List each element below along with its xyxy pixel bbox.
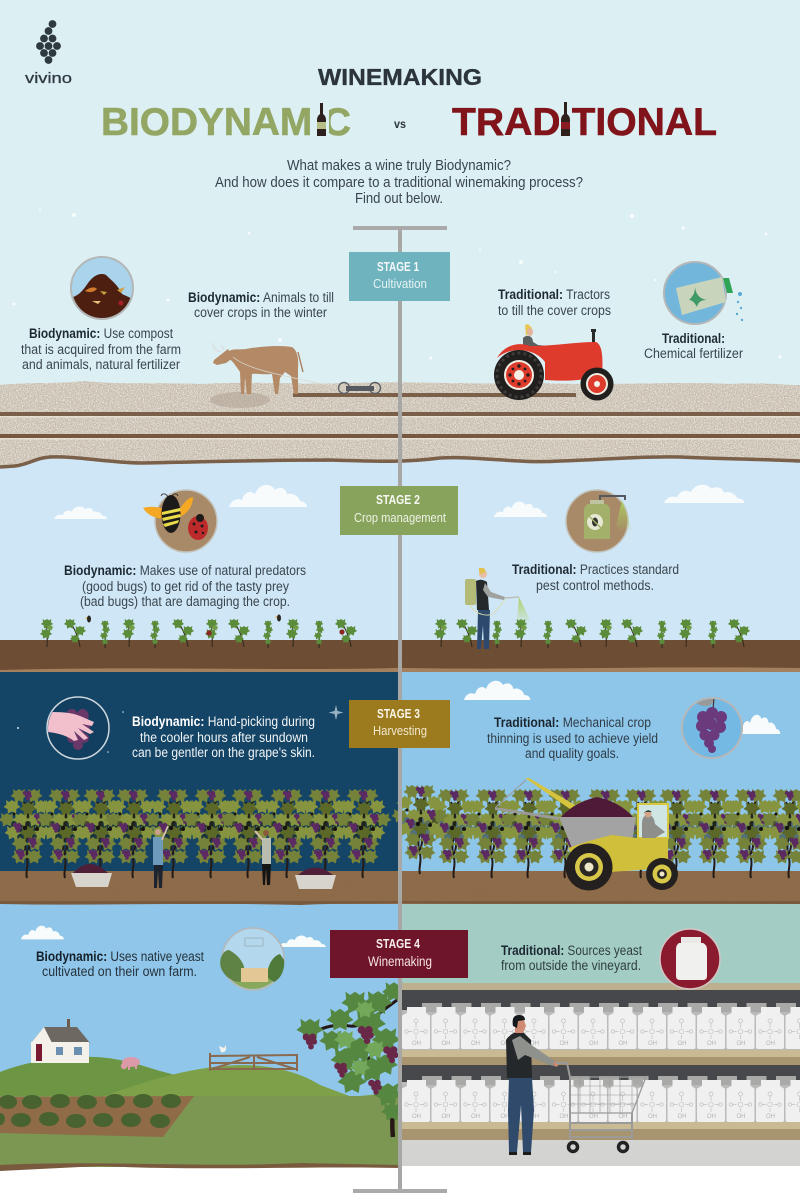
jars row two [402,1076,800,1122]
jars row two: OH [412,1114,421,1120]
stage 4 label: STAGE 4 [376,937,420,951]
text: compost [21,326,181,372]
icon: bee and ladybug [143,490,217,552]
jars row one: OH [560,1041,568,1047]
jars row two: OH [589,1114,598,1120]
text: chemical fertilizer [644,331,743,361]
text: mechanical: Traditional: Mechanical crop [494,715,651,730]
text: predators: (good bugs) to get rid of the tasty prey [82,579,289,594]
stage 4 label [330,930,468,978]
stage 1 label: Cultivation [373,276,427,291]
text: predators: Biodynamic: Makes use of natural predators [64,563,306,578]
icon: tractor [494,324,614,400]
jars row two: OH [500,1114,510,1120]
icon: shopper [506,1015,559,1155]
intro text: And how does it compare to a traditional winemaking process? [215,175,583,191]
icon: native yeast farm [220,928,284,990]
icon: shopping cart [556,1063,646,1152]
icon: grape bunch [682,690,742,758]
text: tractors: Traditional: Tractors [498,287,610,302]
icon: fence [210,1053,297,1071]
stage 3 label: Harvesting [373,723,427,738]
text: chemical fertilizer: Traditional: [662,331,725,346]
title: WINEMAKING [318,64,482,90]
jars row two: OH [442,1114,450,1120]
text: hand-picking: the cooler hours after sundown [140,730,308,745]
jars row one: OH [589,1041,598,1047]
icon: pesticide bottle [566,490,632,552]
text: native yeast: Biodynamic: Uses native yeast [36,949,204,964]
stars [17,705,344,753]
text: tractors [498,287,611,318]
stage 2 label: STAGE 2 [376,493,420,507]
vines biodynamic row [0,789,392,878]
text: mechanical: and quality goals. [525,746,619,761]
text: predators: (bad bugs) that are damaging the crop. [80,594,290,609]
logo: vivino: vivino [25,70,72,87]
jars row one: OH [618,1041,628,1047]
text: sources yeast [501,943,642,973]
heading: Biodynamic: BIODYNAMIC [101,101,351,144]
stage 3 label: STAGE 3 [377,707,420,721]
text: hand-picking [132,714,315,760]
panel: stage 1 ground [0,378,800,470]
panel: stage 2 soil [0,640,800,673]
icon: chicken [219,1045,226,1052]
text: tractors: to till the cover crops [498,303,611,318]
plants: biodynamic row [40,614,357,648]
jars row one: OH [648,1041,657,1047]
text: compost: Biodynamic: Use compost [29,326,173,341]
jars row one: OH [736,1041,746,1047]
vines traditional row [392,785,800,878]
text: native yeast [36,949,204,979]
icon: grape bins [71,864,336,889]
icon: yeast jar [660,929,720,989]
cloud group: stage 4 [21,926,326,947]
text: animals: Biodynamic: Animals to till [188,290,334,305]
icon: vine tree [296,982,406,1137]
panel: stage 4 right wall [400,904,800,984]
jars row two: OH [471,1114,480,1120]
logo: vivino [25,20,72,87]
stage 2 label [340,486,458,535]
jars row one: OH [707,1041,716,1047]
jars row two: OH [618,1114,628,1120]
icon: plough [338,382,380,394]
jars row two: OH [766,1114,775,1120]
panel: header background [0,0,800,400]
intro text: Find out below. [355,191,443,207]
text: hand-picking: Biodynamic: Hand-picking during [132,714,315,729]
panel: store shelves [402,983,800,1166]
jars row two: OH [707,1114,716,1120]
text: native yeast: cultivated on their own farm. [42,964,197,979]
cloud group: stage 3 [464,681,780,734]
text: compost: and animals, natural fertilizer [22,357,180,372]
intro text [215,158,583,207]
panel: farm landscape [0,1019,400,1171]
panel: stage 2 background [0,450,800,641]
text: mechanical [487,715,658,761]
icon: pig [121,1057,140,1070]
icon: picker one [153,826,168,888]
intro text: What makes a wine truly Biodynamic? [287,158,511,174]
jars row one: OH [766,1041,775,1047]
icon: farmhouse [31,1019,90,1063]
jars row one: OH [471,1041,480,1047]
stage 3 label [349,700,450,748]
stage 1 label: STAGE 1 [377,260,419,274]
text: sources yeast: from outside the vineyard. [501,958,641,973]
jars row one: OH [412,1041,421,1047]
stage 1 label [349,252,450,301]
panel: stage 3 backgrounds [0,672,800,872]
stage 4 label: Winemaking [368,953,432,969]
jars row two: OH [648,1114,657,1120]
text: animals [188,290,334,320]
panel: stage 4 left sky [0,904,400,1166]
title [101,64,717,144]
snow dots [12,209,782,360]
panel: stage 3 soil [0,871,800,904]
vs: vs [394,117,406,131]
text: hand-picking: can be gentler on the grape's skin. [132,745,315,760]
text: chemical fertilizer: Chemical fertilizer [644,346,743,361]
text: compost: that is acquired from the farm [21,342,181,357]
text: predators [64,563,306,609]
jars row one: OH [500,1041,510,1047]
plants: traditional row [434,619,750,648]
jars row one: OH [530,1041,539,1047]
icon: fertilizer bag [664,262,743,324]
bugs [85,614,345,636]
text: pest control [512,562,679,593]
icon: sprayer farmer [465,568,530,649]
icon: compost [70,257,135,320]
jars row two: OH [736,1114,746,1120]
text: sources yeast: Traditional: Sources yeast [501,943,642,958]
text: animals: cover crops in the winter [194,305,327,320]
jars row one [402,1003,800,1049]
jars row one: OH [678,1041,686,1047]
jars row two: OH [678,1114,686,1120]
icon: harvester [495,778,678,890]
text: pest control: Traditional: Practices standard [512,562,679,577]
cloud group: stage 2 [54,485,744,519]
field [0,1094,194,1137]
icon: hand picking grapes [45,697,109,759]
jars row one: OH [442,1041,450,1047]
jars row two: OH [530,1114,539,1120]
centre pole [353,226,447,1193]
text: mechanical: thinning is used to achieve yield [487,731,658,746]
jars row two: OH [560,1114,568,1120]
heading: Traditional: TRADITIONAL [452,101,717,144]
stage 2 label: Crop management [354,510,446,525]
text: pest control: pest control methods. [536,578,654,593]
icon: ox and plough [213,343,380,394]
icon: picker two [255,830,271,885]
